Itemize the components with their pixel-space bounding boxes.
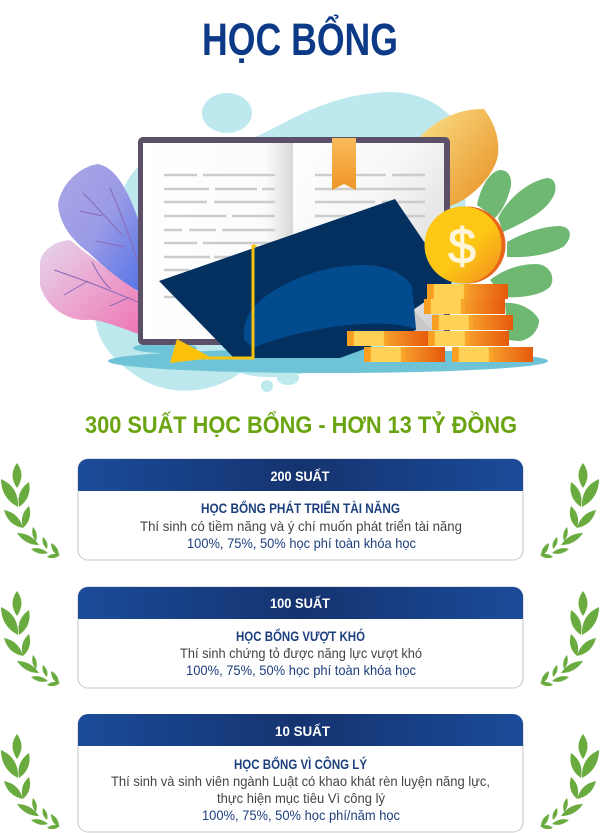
award: 100%, 75%, 50% học phí/năm học <box>202 807 400 823</box>
coin stack <box>347 284 533 362</box>
dollar coin: $ <box>448 218 476 274</box>
scholarship name: HỌC BỔNG VÌ CÔNG LÝ <box>234 755 368 772</box>
header bar <box>78 714 523 746</box>
graduation cap <box>159 199 452 363</box>
illustration: book, cap and coins <box>40 92 570 392</box>
header bar <box>78 459 523 491</box>
scholarship name: HỌC BỔNG VƯỢT KHÓ <box>236 627 365 644</box>
header text: 10 SUẤT <box>275 723 330 739</box>
award: 100%, 75%, 50% học phí toàn khóa học <box>187 535 416 551</box>
eligibility: Thí sinh có tiềm năng và ý chí muốn phát triển tài năng <box>140 518 462 534</box>
laurel: row 2 left <box>1 591 60 686</box>
leaf veins <box>54 188 138 306</box>
eligibility: Thí sinh và sinh viên ngành Luật có khao khát rèn luyện năng lực, <box>111 773 490 789</box>
text lines on pages <box>164 175 425 297</box>
open book <box>138 137 450 345</box>
bookmark <box>332 138 356 190</box>
header bar <box>78 587 523 619</box>
eligibility: Thí sinh chứng tỏ được năng lực vượt khó <box>180 645 422 661</box>
award: 100%, 75%, 50% học phí toàn khóa học <box>186 662 416 678</box>
laurel: row 3 right <box>540 734 599 829</box>
dollar coin <box>424 206 506 284</box>
purple leaf <box>58 164 142 292</box>
green leaves <box>477 170 570 341</box>
header text: 200 SUẤT <box>270 468 330 484</box>
eligibility: thực hiện mục tiêu Vì công lý <box>217 790 385 806</box>
background blobs <box>95 92 470 392</box>
laurel: row 2 right <box>540 591 599 686</box>
panel: 10 suất <box>78 714 523 832</box>
eligibility <box>111 773 490 806</box>
orange leaf <box>420 109 498 206</box>
subtitle: 300 SUẤT HỌC BỔNG - HƠN 13 TỶ ĐỒNG <box>85 410 517 439</box>
laurel: row 1 left <box>1 463 60 558</box>
ground shadow <box>133 343 197 353</box>
tassel <box>170 244 258 363</box>
title: HỌC BỔNG <box>202 14 398 65</box>
pink leaf <box>40 240 142 335</box>
header text: 100 SUẤT <box>270 595 330 611</box>
panel: 200 suất <box>78 459 523 560</box>
panel: 100 suất <box>78 587 523 688</box>
laurel: row 1 right <box>540 463 599 558</box>
scholarship name: HỌC BỔNG PHÁT TRIỂN TÀI NĂNG <box>201 499 400 516</box>
laurel: row 3 left <box>1 734 60 829</box>
